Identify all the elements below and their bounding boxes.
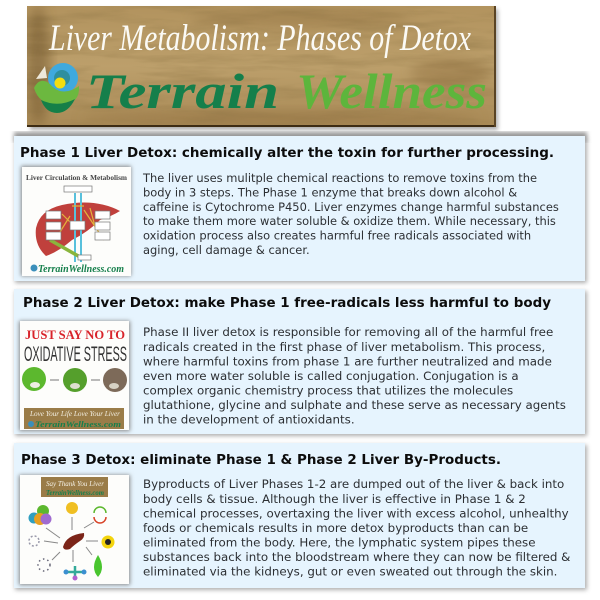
text block: phase 3: foods or chemicals results in more detox byproducts than can be — [143, 521, 528, 535]
text block: phase 3: chemical processes, overtaxing the liver with excess alcohol, unhealthy — [143, 506, 569, 520]
heading: phase 1: Phase 1 Liver Detox: chemically alter the toxin for further processing. — [20, 146, 554, 161]
text block: phase 1 — [142, 171, 559, 257]
panel: phase 3 — [14, 443, 587, 590]
text block: phase 3: eliminated via the kidneys, gut or even sweated out through the skin. — [143, 564, 557, 578]
text block: phase 3: substances back into the bloodstream where they can now be filtered & — [143, 550, 570, 564]
image: oxidative stress: Love Your Life Love Your Liver — [29, 410, 120, 418]
text block: phase 1: to make them more water soluble & oxidize them. While necessary, this — [143, 214, 556, 228]
text block: phase 1: body in 3 steps. The Phase 1 enzyme that breaks down alcohol & — [143, 186, 517, 200]
image: liver by-products: Say Thank You Liver — [46, 480, 104, 488]
text block: phase 2 — [143, 325, 566, 426]
logo wordmark: Wellness: Wellness — [296, 63, 487, 119]
image: liver circulation diagram: Liver Circulation & Metabolism — [26, 173, 128, 182]
panel: phase 2 — [14, 289, 587, 436]
text block: phase 3: eliminated from the body. Here, the lymphatic system pipes these — [143, 536, 536, 550]
text block: phase 2: glutathione, glycine and sulphate and these serve as necessary agents — [143, 398, 566, 412]
panel: phase 1 — [14, 132, 587, 283]
text block: phase 1: aging, cell damage & cancer. — [143, 243, 310, 257]
text block: phase 2: in the development of antioxidants. — [143, 412, 355, 426]
text block: phase 3: Byproducts of Liver Phases 1-2 are dumped out of the liver & back into — [143, 477, 564, 491]
text block: phase 1: The liver uses mulitple chemical reactions to remove toxins from the — [142, 171, 537, 185]
text block: phase 3: body cells & tissue. Although the liver is effective in Phase 1 & 2 — [143, 492, 526, 506]
image: oxidative stress — [19, 321, 130, 431]
title: Liver Metabolism: Phases of Detox — [48, 18, 471, 59]
banner: wooden sign — [26, 6, 498, 130]
text block: phase 2: where harmful toxins from phase 1 are further neutralized and made — [143, 354, 552, 368]
image: liver circulation diagram: TerrainWellness.com — [38, 264, 124, 275]
image: oxidative stress: TerrainWellness.com — [35, 420, 121, 429]
image: oxidative stress: OXIDATIVE STRESS — [24, 343, 127, 366]
logo wordmark: Terrain: Terrain — [86, 63, 279, 119]
image: liver by-products — [19, 475, 130, 585]
logo icon — [34, 63, 79, 113]
text block: phase 2: even more water soluble is called conjugation. Conjugation is a — [143, 369, 519, 383]
text block: phase 1: caffeine is Cytochrome P450. Liver enzymes change harmful substances — [143, 200, 559, 214]
text block: phase 1: oxidation process also creates harmful free radicals associated with — [143, 228, 531, 242]
text block: phase 3 — [143, 477, 570, 578]
image: liver circulation diagram — [21, 166, 131, 276]
text block: phase 2: complex organic chemistry process that utilizes the molecules — [143, 384, 513, 398]
heading: phase 3: Phase 3 Detox: eliminate Phase 1 & Phase 2 Liver By-Products. — [21, 453, 501, 468]
text block: phase 2: Phase II liver detox is responsible for removing all of the harmful free — [143, 325, 553, 339]
heading: phase 2: Phase 2 Liver Detox: make Phase 1 free-radicals less harmful to body — [23, 296, 552, 311]
image: liver by-products: TerrainWellness.com — [46, 489, 105, 497]
text block: phase 2: radicals created in the first phase of liver metabolism. This process, — [143, 340, 545, 354]
image: oxidative stress: JUST SAY NO TO — [25, 328, 125, 342]
